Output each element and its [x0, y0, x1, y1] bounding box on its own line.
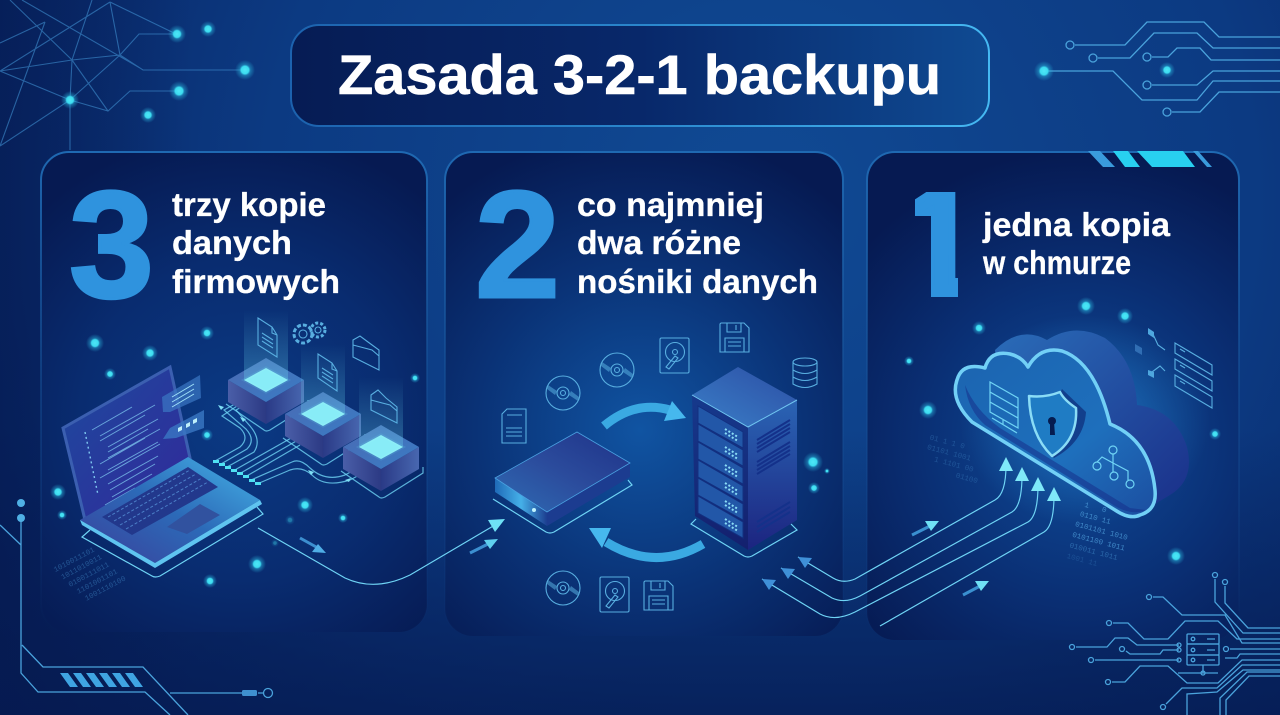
binary panel 1	[53, 540, 128, 610]
laptop platform	[82, 507, 263, 577]
binary near cloud: 0101101 1010	[1074, 521, 1129, 543]
circuit lines bottom right	[1070, 572, 1280, 715]
text panel 2: dwa różne	[577, 224, 741, 261]
binary panel 1: 1011010011	[60, 554, 104, 582]
icon: document 2	[318, 354, 337, 391]
icon: cloud server	[990, 382, 1018, 433]
icon: hard drive	[493, 432, 632, 533]
cloud front	[955, 350, 1155, 517]
binary panel 1: 1010011101	[53, 546, 97, 575]
arrow: server to hard drive	[589, 528, 703, 558]
network lines top left	[0, 0, 245, 150]
laptop base	[80, 457, 260, 563]
icon: document	[258, 318, 277, 357]
icon: cd 1	[546, 376, 580, 410]
panel 2 number: 2	[475, 160, 560, 330]
text panel 3: w chmurze	[982, 244, 1131, 281]
icon: shield	[1029, 389, 1086, 458]
text panel 3: jedna kopia	[982, 206, 1171, 243]
connector dots	[213, 460, 261, 485]
icon: laptop and mini servers	[53, 310, 423, 610]
binary panel 1: 1101001101	[76, 568, 120, 597]
panel 1 number: 3	[69, 160, 154, 330]
mini server 1	[226, 310, 308, 431]
rack slots	[698, 406, 743, 538]
small arrow 1	[912, 525, 932, 535]
mini server 2	[283, 344, 365, 465]
panel 3 number: 1	[896, 160, 980, 330]
panel: 3 copies	[41, 152, 427, 632]
icon: hdd 1	[660, 338, 689, 373]
icon: folder 1	[353, 336, 379, 370]
text panel 2: co najmniej	[577, 186, 764, 223]
icon: network	[1093, 446, 1134, 488]
binary near cloud: 1	[1083, 502, 1090, 511]
data connectors	[215, 398, 365, 484]
binary near cloud	[921, 435, 1134, 575]
binary near cloud: 01 1 1 0	[929, 435, 966, 452]
binary near cloud: 010011 1011	[1068, 542, 1119, 563]
laptop screen	[63, 367, 190, 520]
small arrow	[470, 543, 490, 553]
binary near cloud: 0	[1101, 507, 1108, 516]
icon: database	[793, 358, 817, 388]
text panel 2: nośniki danych	[577, 263, 818, 300]
text panel 2	[577, 186, 818, 300]
binary near cloud: 1001 11	[1065, 553, 1098, 569]
icon: server rack	[691, 367, 797, 557]
glowing particles	[50, 21, 1221, 588]
icon: sd card	[502, 409, 526, 443]
title: Zasada 3-2-1 backupu	[338, 43, 941, 106]
circuit lines bottom left	[0, 499, 272, 715]
panel: 1 cloud	[867, 152, 1239, 640]
binary panel 1: 0100111011	[68, 561, 112, 590]
icon: server list top right of cloud	[1135, 328, 1212, 408]
long arrow from panel 1 to panel 2	[258, 519, 505, 584]
cloud shadow	[965, 385, 1146, 512]
circuit lines top right	[1044, 22, 1280, 116]
icon: floppy 2	[644, 581, 673, 610]
text panel 1	[172, 186, 340, 300]
text panel 1: danych	[172, 224, 292, 261]
icon: server	[1178, 634, 1219, 675]
arrows: cloud to server	[762, 457, 1061, 626]
icon: floppy 1	[720, 323, 749, 352]
title box	[291, 25, 989, 126]
mini server 3	[341, 377, 423, 498]
icon: folder 2	[371, 390, 397, 423]
text panel 3	[982, 206, 1171, 281]
trackpad	[167, 504, 220, 534]
floating windows	[162, 375, 204, 439]
keyboard	[102, 467, 218, 535]
binary near cloud: 1 1101 00	[933, 456, 975, 475]
icon: cd 2	[600, 353, 634, 387]
icon: gears	[294, 323, 325, 343]
binary near cloud: 0101100 1011	[1071, 532, 1126, 554]
text panel 1: firmowych	[172, 263, 340, 300]
icon: cloud	[955, 315, 1210, 525]
cloud back	[995, 330, 1189, 517]
binary panel 1: 1001110100	[84, 575, 128, 604]
binary near cloud: 01100	[955, 473, 979, 486]
decorative stripes on panel 3	[1088, 151, 1212, 167]
binary near cloud: 01101 1001	[926, 444, 972, 464]
small arrow	[300, 538, 318, 548]
binary near cloud: 0110 11	[1079, 511, 1112, 527]
icon: cd 3	[546, 571, 580, 605]
small arrow 2	[963, 585, 982, 595]
arrow: hard drive to server	[604, 401, 686, 426]
panel: 2 media	[445, 152, 843, 636]
icon: hdd 2	[600, 577, 629, 612]
text panel 1: trzy kopie	[172, 186, 326, 223]
icons: media	[502, 323, 817, 612]
